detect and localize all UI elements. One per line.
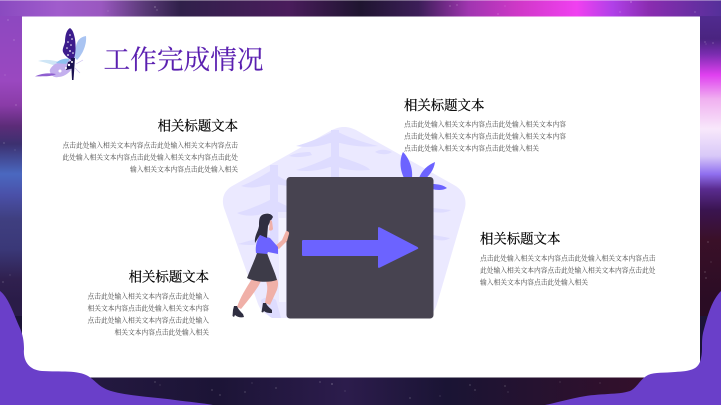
body: top left: 此处输入相关文本内容点击此处输入相关文本内容点击此处	[62, 152, 238, 162]
body: right: 点击此处输入相关文本内容点击此处输入相关文本内容点击	[480, 254, 656, 262]
heading: top right: 相关标题文本	[404, 97, 484, 113]
text block: bottom left	[87, 268, 209, 336]
text block: top left	[62, 118, 238, 174]
title: 工作完成情况	[104, 45, 264, 75]
shoes	[232, 306, 244, 317]
pentagon backdrop	[223, 127, 466, 318]
body: top left: 输入相关文本内容点击此处输入相关	[130, 164, 238, 174]
hair	[255, 214, 273, 243]
body: top right: 点击此处输入相关文本内容点击此处输入相关文本内容	[404, 120, 566, 128]
body: right	[480, 254, 656, 286]
body: right: 此处输入相关文本内容点击此处输入相关文本内容点击此处	[480, 266, 656, 274]
body: right: 输入相关文本内容点击此处输入相关	[480, 278, 588, 286]
text block: top right	[404, 97, 566, 152]
woman pushing the box	[232, 214, 289, 317]
heading: right: 相关标题文本	[480, 230, 560, 246]
body: bottom left: 点击此处输入相关文本内容点击此处输入	[87, 316, 209, 324]
body: bottom left: 相关文本内容点击此处输入相关	[114, 328, 209, 336]
icon: butterfly	[35, 28, 86, 80]
pine tree silhouettes	[237, 130, 451, 318]
body: top right: 点击此处输入相关文本内容点击此处输入相关文本内容	[404, 132, 566, 140]
body: bottom left: 点击此处输入相关文本内容点击此处输入	[87, 292, 209, 300]
illustration: arrow box with woman	[223, 127, 466, 318]
body: top left: 点击此处输入相关文本内容点击此处输入相关文本内容点击	[62, 140, 238, 150]
heading: top left: 相关标题文本	[158, 118, 238, 134]
body: bottom left	[87, 292, 209, 336]
face	[269, 220, 273, 231]
arrow	[302, 227, 418, 268]
arm	[274, 231, 289, 249]
body: top right: 点击此处输入相关文本内容点击此处输入相关	[404, 144, 539, 152]
corner wave: bottom left	[0, 291, 213, 405]
skirt	[247, 253, 277, 282]
text block: right	[480, 230, 656, 286]
pale trunk highlight	[279, 218, 286, 302]
body: bottom left: 相关文本内容点击此处输入相关文本内容	[87, 304, 209, 312]
top	[256, 235, 278, 254]
leaves	[400, 152, 447, 190]
dark square	[286, 177, 434, 318]
heading: bottom left: 相关标题文本	[129, 268, 209, 284]
corner wave: bottom right	[545, 291, 721, 405]
body: top left	[62, 140, 238, 174]
body: top right	[404, 120, 566, 152]
legs	[237, 279, 261, 309]
